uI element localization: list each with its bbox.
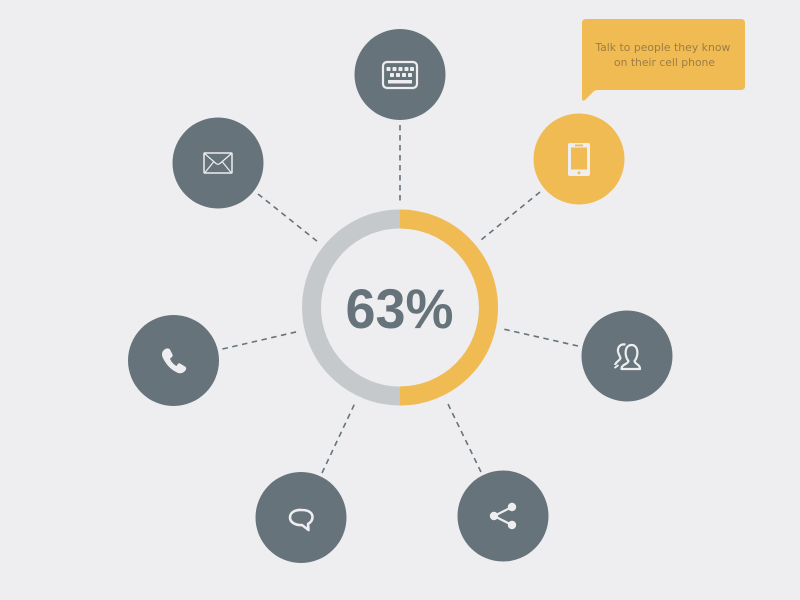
donut chart: 63% <box>312 219 488 396</box>
icon node: share <box>458 470 548 562</box>
icon node: people <box>582 310 672 402</box>
callout text: on their cell phone <box>614 57 715 69</box>
icon node: speech bubble <box>256 472 346 563</box>
icon node: email <box>172 118 264 208</box>
icon node: keyboard <box>354 29 446 120</box>
callout <box>582 19 745 101</box>
icon node: telephone <box>128 315 219 406</box>
percentage value: 63% <box>346 277 454 340</box>
icon node: mobile phone (highlighted) <box>534 114 624 204</box>
callout text: Talk to people they know <box>594 42 731 54</box>
dashed connectors <box>222 125 578 473</box>
